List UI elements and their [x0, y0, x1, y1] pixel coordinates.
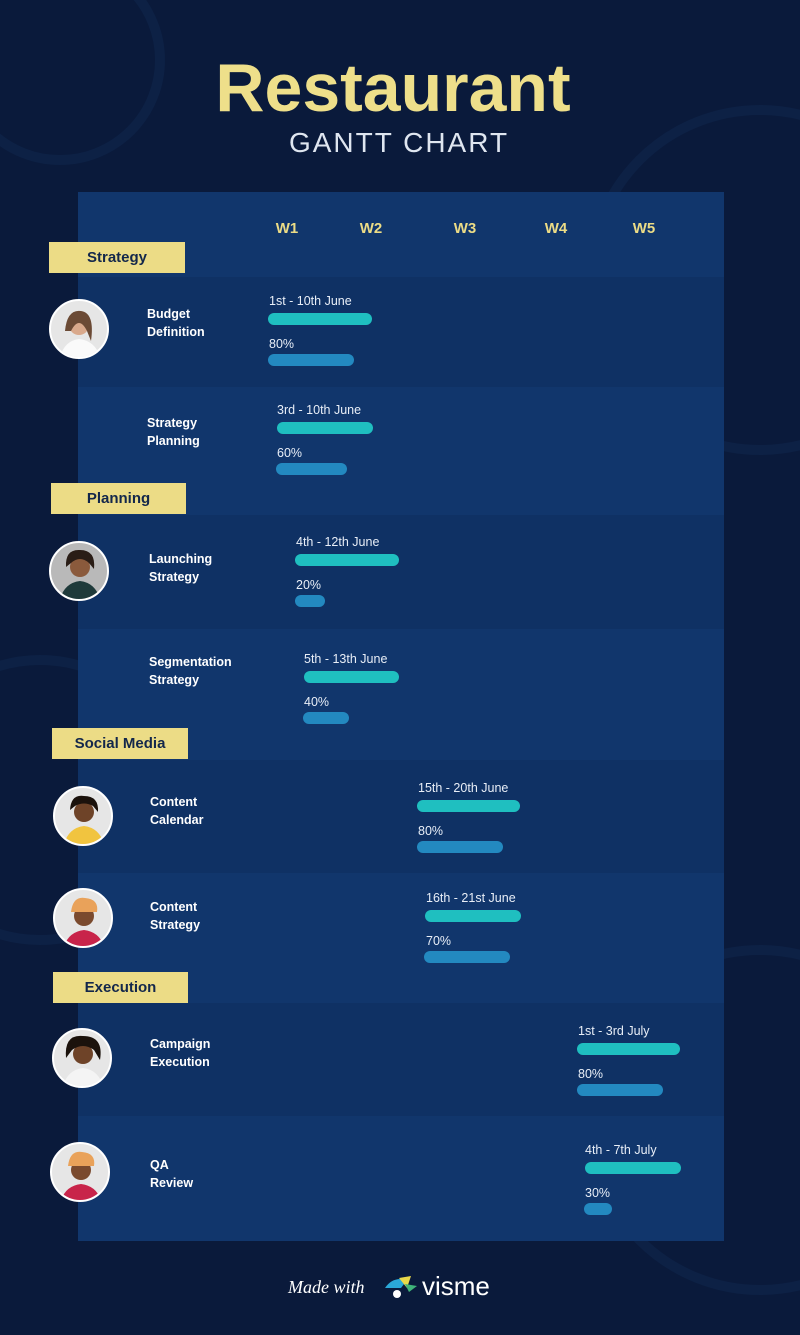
row: QA Review: QA	[150, 1158, 169, 1172]
avatar 3	[49, 541, 109, 601]
chart panel	[78, 192, 724, 1241]
row: Segmentation Strategy: 40%	[304, 695, 329, 709]
row: Content Strategy: 16th - 21st June	[426, 891, 516, 905]
row: Strategy Planning: 3rd - 10th June	[277, 403, 361, 417]
row: Campaign Execution: Execution	[150, 1055, 210, 1069]
category: Social Media	[52, 728, 188, 759]
footer: made with visme: Made with	[288, 1277, 364, 1297]
row: Campaign Execution: Campaign	[150, 1037, 210, 1051]
row: Strategy Planning: Planning	[147, 434, 200, 448]
category: Execution	[53, 972, 188, 1003]
week headers: W5	[633, 220, 655, 237]
category: Execution: Execution	[85, 979, 156, 996]
row: Segmentation Strategy	[149, 652, 399, 724]
row: Segmentation Strategy: Segmentation	[149, 655, 232, 669]
row: Strategy Planning: Strategy	[147, 416, 197, 430]
row: Content Calendar: Calendar	[150, 813, 204, 827]
category: Planning	[51, 483, 186, 514]
avatar 7	[52, 1028, 112, 1088]
row: Content Strategy: Strategy	[150, 918, 200, 932]
category: Strategy: Strategy	[87, 249, 147, 266]
row: Budget Definition: 80%	[269, 337, 294, 351]
row: Content Strategy: 70%	[426, 934, 451, 948]
avatar 1	[49, 299, 109, 359]
row: Content Strategy: Content	[150, 900, 197, 914]
row: Campaign Execution: 80%	[578, 1067, 603, 1081]
week headers: W3	[454, 220, 476, 237]
row: QA Review: Review	[150, 1176, 193, 1190]
week headers: W4	[545, 220, 567, 237]
row: Campaign Execution	[150, 1024, 680, 1096]
week headers: W2	[360, 220, 382, 237]
row: Launching Strategy: Strategy	[149, 570, 199, 584]
row: Budget Definition: 1st - 10th June	[269, 294, 352, 308]
week headers	[276, 220, 655, 237]
subtitle: GANTT CHART	[289, 127, 509, 158]
row: Launching Strategy: 20%	[296, 578, 321, 592]
week headers: W1	[276, 220, 298, 237]
row: Budget Definition: Budget	[147, 307, 190, 321]
row: Segmentation Strategy: Strategy	[149, 673, 199, 687]
footer: made with visme	[288, 1271, 490, 1301]
row: Content Calendar	[150, 781, 520, 853]
row: QA Review: 4th - 7th July	[585, 1143, 657, 1157]
row: Content Calendar: Content	[150, 795, 197, 809]
row: Launching Strategy	[149, 535, 399, 607]
row: Content Strategy	[150, 891, 521, 963]
avatar 5	[53, 786, 113, 846]
row: Launching Strategy: Launching	[149, 552, 212, 566]
category: Strategy	[49, 242, 185, 273]
row: QA Review: 30%	[585, 1186, 610, 1200]
avatar 8	[50, 1142, 110, 1202]
row: Launching Strategy: 4th - 12th June	[296, 535, 379, 549]
row: Budget Definition	[147, 294, 372, 366]
row: Content Calendar: 15th - 20th June	[418, 781, 508, 795]
avatar 6	[53, 888, 113, 948]
row: Strategy Planning	[147, 403, 373, 475]
category: Social Media: Social Media	[75, 735, 165, 752]
footer: made with visme: visme	[422, 1271, 490, 1301]
row: Budget Definition: Definition	[147, 325, 205, 339]
row: QA Review	[150, 1143, 681, 1215]
category: Planning: Planning	[87, 490, 150, 507]
title: Restaurant	[215, 50, 571, 126]
row: Strategy Planning: 60%	[277, 446, 302, 460]
row: Campaign Execution: 1st - 3rd July	[578, 1024, 650, 1038]
row: Segmentation Strategy: 5th - 13th June	[304, 652, 387, 666]
row: Content Calendar: 80%	[418, 824, 443, 838]
